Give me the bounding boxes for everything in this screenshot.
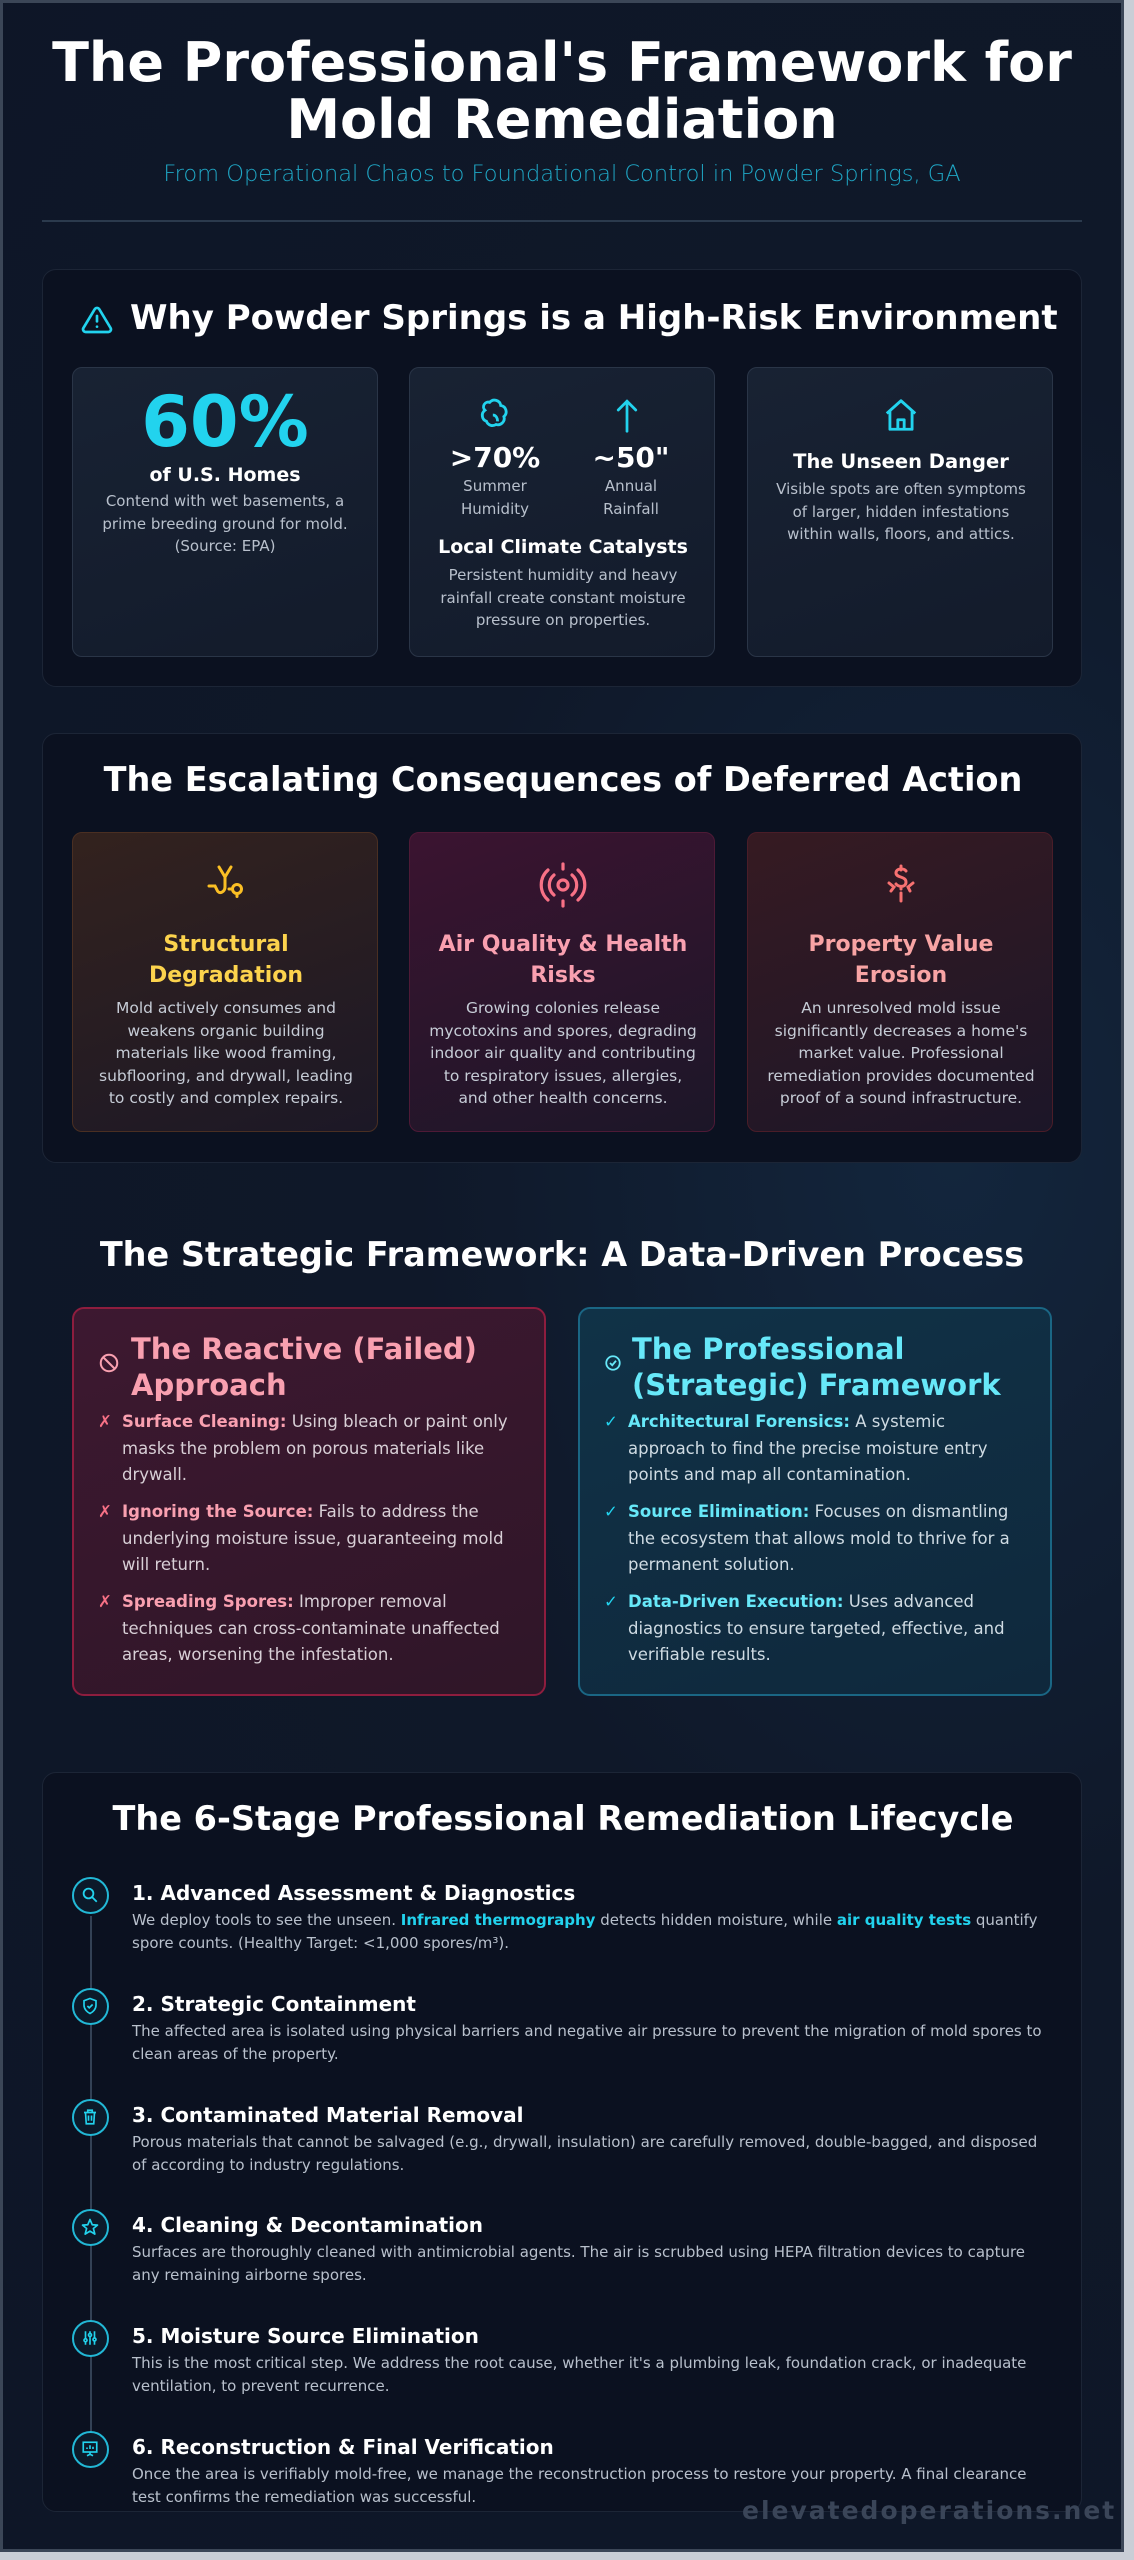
step 4: Surfaces are thoroughly cleaned with antimicrobial agents. The air is scrubbed using HEPA filtration devices to capture any remaining airborne spores. bbox=[132, 2243, 1025, 2284]
step 6: Once the area is verifiably mold-free, we manage the reconstruction process to restore your property. A final clearance test confirms the remediation was successful. bbox=[132, 2465, 1027, 2506]
card: air quality bbox=[409, 832, 715, 1132]
title: reactive: Approach bbox=[131, 1368, 287, 1402]
card: property value: An unresolved mold issue significantly decreases a home's market value. Professional remediation provides documented proof of a sound infrastructure. bbox=[767, 999, 1035, 1107]
step 4 bbox=[72, 2209, 1025, 2284]
step 1: We deploy tools to see the unseen. Infrared thermography detects hidden moisture, while air quality tests quantify spore counts. (Healthy Target: <1,000 spores/m³). bbox=[132, 1911, 1038, 1952]
panel: consequences bbox=[42, 733, 1082, 1163]
title: professional bbox=[632, 1332, 1002, 1402]
panel: reactive approach bbox=[72, 1307, 546, 1696]
list: professional items: ✓ bbox=[604, 1592, 618, 1611]
icon: warning bbox=[82, 306, 112, 334]
list: reactive items: ✗ bbox=[98, 1592, 112, 1611]
icon: arrow up bbox=[616, 399, 638, 433]
title bbox=[52, 31, 1072, 151]
step 3: Porous materials that cannot be salvaged (e.g., drywall, insulation) are carefully removed, double-bagged, and disposed of according to industry regulations. bbox=[132, 2133, 1037, 2174]
list: reactive items: ✗ bbox=[98, 1502, 112, 1521]
title: Mold Remediation bbox=[286, 88, 838, 151]
card: local climate: >70% bbox=[450, 441, 540, 474]
card: 60%: Contend with wet basements, a prime breeding ground for mold. (Source: EPA) bbox=[102, 492, 348, 555]
step 6 bbox=[72, 2431, 1027, 2506]
step 3 bbox=[72, 2099, 1037, 2174]
card: structural degradation: Structural bbox=[163, 932, 289, 957]
subtitle: From Operational Chaos to Foundational Control in Powder Springs, GA bbox=[163, 161, 961, 187]
panel: lifecycle bbox=[42, 1772, 1082, 2512]
card: unseen danger: The Unseen Danger bbox=[793, 450, 1009, 473]
card: property value bbox=[747, 832, 1053, 1132]
watermark: elevatedoperations.net bbox=[742, 2496, 1116, 2525]
card: air quality: Growing colonies release mycotoxins and spores, degrading indoor air quality and contributing to respiratory issues, allergies, and other health concerns. bbox=[429, 999, 697, 1107]
icon: prohibited bbox=[100, 1354, 118, 1372]
list: reactive items: Surface Cleaning: Using bleach or paint only masks the problem on porous materials like drywall. bbox=[122, 1412, 508, 1484]
step 5 bbox=[72, 2320, 1026, 2395]
card: 60% bbox=[72, 367, 378, 657]
card: air quality: Air Quality & Health bbox=[439, 932, 687, 957]
card: local climate: Local Climate Catalysts bbox=[438, 536, 688, 558]
icon: structural bbox=[208, 865, 243, 898]
heading: strategic framework: The Strategic Framework: A Data-Driven Process bbox=[100, 1235, 1024, 1274]
card: local climate: Persistent humidity and heavy rainfall create constant moisture pressure on properties. bbox=[440, 566, 686, 629]
icon: search bbox=[72, 1877, 109, 1914]
card: 60%: of U.S. Homes bbox=[149, 464, 301, 486]
list: reactive items: ✗ bbox=[98, 1412, 112, 1431]
heading: why powder springs: Why Powder Springs is a High-Risk Environment bbox=[130, 298, 1058, 338]
list: reactive items: Ignoring the Source: Fails to address the underlying moisture issue, guaranteeing mold will return. bbox=[122, 1502, 504, 1574]
card: local climate: Rainfall bbox=[603, 500, 659, 518]
card: unseen danger: Visible spots are often symptoms of larger, hidden infestations within walls, floors, and attics. bbox=[776, 480, 1026, 543]
step 1 bbox=[72, 1877, 1038, 1952]
title: The Professional's Framework for bbox=[52, 31, 1072, 94]
list: professional items: ✓ bbox=[604, 1502, 618, 1521]
card: property value: Property Value bbox=[809, 932, 993, 957]
card: local climate: Annual bbox=[605, 477, 657, 495]
list: reactive items: Spreading Spores: Improper removal techniques can cross-contaminate unaffected areas, worsening the infestation. bbox=[122, 1592, 500, 1664]
icon: house bbox=[886, 399, 916, 431]
list: professional items: Data-Driven Execution: Uses advanced diagnostics to ensure targeted, effective, and verifiable results. bbox=[628, 1592, 1005, 1664]
card: local climate: Humidity bbox=[461, 500, 529, 518]
card: structural degradation: Mold actively consumes and weakens organic building materials like wood framing, subflooring, and drywall, leading to costly and complex repairs. bbox=[99, 999, 353, 1107]
list: reactive items bbox=[98, 1412, 508, 1664]
step 5: This is the most critical step. We address the root cause, whether it's a plumbing leak, foundation crack, or inadequate ventilation, to prevent recurrence. bbox=[132, 2354, 1026, 2395]
step 2: 2. Strategic Containment bbox=[132, 1992, 416, 2016]
icon: humidity bbox=[480, 398, 508, 427]
step 4: 4. Cleaning & Decontamination bbox=[132, 2213, 483, 2237]
card: structural degradation: Degradation bbox=[149, 963, 303, 988]
icon: radiating signal bbox=[540, 862, 586, 908]
step 1: 1. Advanced Assessment & Diagnostics bbox=[132, 1881, 575, 1905]
list: professional items bbox=[604, 1412, 1010, 1664]
title: professional: (Strategic) Framework bbox=[632, 1368, 1001, 1402]
step 6: 6. Reconstruction & Final Verification bbox=[132, 2435, 554, 2459]
title: reactive: The Reactive (Failed) bbox=[131, 1332, 477, 1366]
icon: star bbox=[72, 2209, 109, 2246]
card: air quality: Risks bbox=[530, 963, 596, 988]
panel: professional framework bbox=[578, 1307, 1052, 1696]
heading: lifecycle: The 6-Stage Professional Remediation Lifecycle bbox=[113, 1799, 1013, 1838]
icon: check circle bbox=[605, 1355, 621, 1371]
icon: shield bbox=[72, 1988, 109, 2025]
panel: high-risk environment bbox=[42, 269, 1082, 687]
card: structural degradation bbox=[72, 832, 378, 1132]
icon: presentation bbox=[72, 2431, 109, 2468]
title: professional: The Professional bbox=[632, 1332, 904, 1366]
icon: dollar bbox=[887, 864, 915, 902]
list: professional items: ✓ bbox=[604, 1412, 618, 1431]
card: property value: Erosion bbox=[855, 963, 947, 988]
card: local climate: ~50" bbox=[592, 441, 670, 474]
step 5: 5. Moisture Source Elimination bbox=[132, 2324, 479, 2348]
card: local climate: Summer bbox=[463, 477, 527, 495]
step 2 bbox=[72, 1988, 1042, 2063]
heading: consequences: The Escalating Consequences of Deferred Action bbox=[104, 760, 1022, 799]
card: 60%: 60% bbox=[141, 381, 309, 463]
card: unseen danger bbox=[747, 367, 1053, 657]
icon: sliders bbox=[72, 2320, 109, 2357]
list: professional items: Source Elimination: Focuses on dismantling the ecosystem that allows mold to thrive for a permanent solution. bbox=[628, 1502, 1010, 1574]
list: professional items: Architectural Forensics: A systemic approach to find the precise moisture entry points and map all contamination. bbox=[628, 1412, 988, 1484]
card: local climate bbox=[409, 367, 715, 657]
step 3: 3. Contaminated Material Removal bbox=[132, 2103, 524, 2127]
icon: trash bbox=[72, 2099, 109, 2136]
step 2: The affected area is isolated using physical barriers and negative air pressure to prevent the migration of mold spores to clean areas of the property. bbox=[132, 2022, 1042, 2063]
title: reactive bbox=[131, 1332, 477, 1402]
